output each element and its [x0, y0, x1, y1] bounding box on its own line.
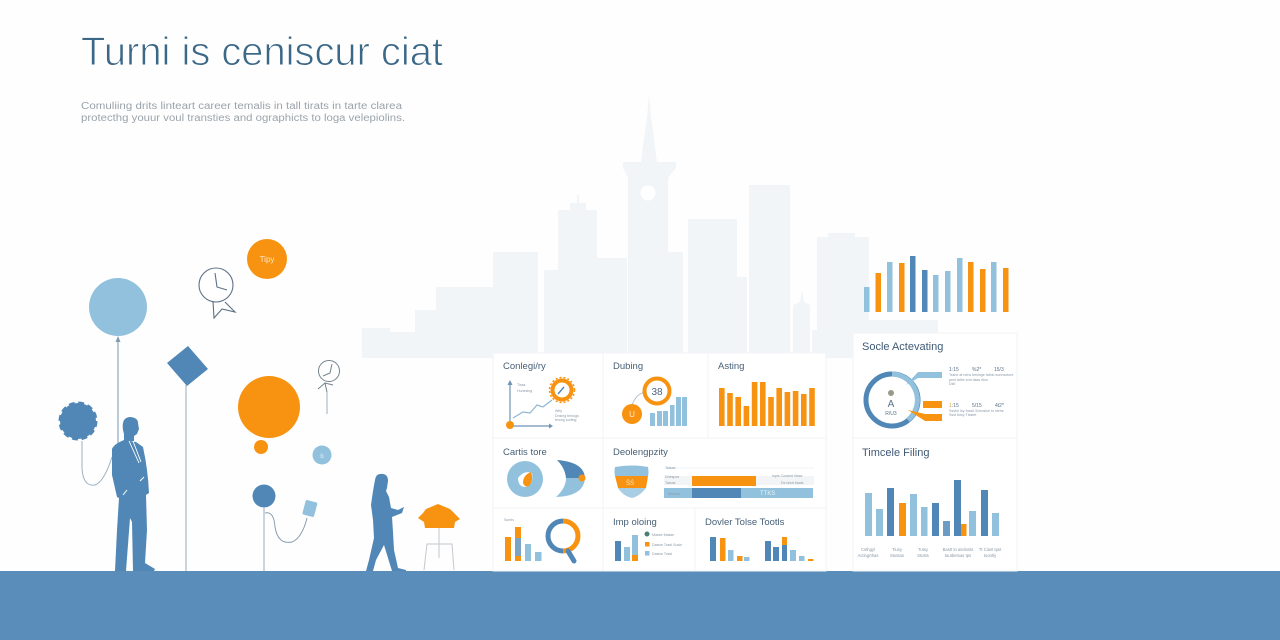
panel: timeline bars: Timcele Filing [862, 447, 929, 459]
panel: timeline bars [853, 438, 1017, 571]
panel: donut summary: Dslt [949, 382, 955, 386]
panel: shield and stacked bars: Ds Isisrt tlaats [781, 481, 804, 485]
small light blue dot: b [320, 454, 324, 460]
panel: timeline bars: Tutsy [918, 547, 929, 552]
panel: bars with legend: Masse Masse [652, 533, 674, 537]
panel: donut summary: R/U3 [885, 411, 897, 417]
panel: timeline bars: Stustas [890, 553, 904, 558]
orange badge: Tipy [260, 255, 274, 264]
panel: line chart: Dnsing tenlugs [555, 414, 579, 418]
man silhouette [112, 417, 155, 571]
panel: grouped bars: Dovler Tolse Tootls [705, 517, 785, 528]
panel: line chart: Hunesing [517, 389, 532, 393]
panel: donut summary: pest tathe snd dsas dlns [949, 378, 988, 382]
panel: gauge and bars: 38 [651, 387, 663, 398]
blue balloon with device [252, 484, 318, 571]
small light blue dot [312, 446, 332, 464]
orange badge [247, 239, 287, 279]
panel: donut summary: Ssshe Isy fossh Sneoslse to stehe [949, 409, 1004, 413]
subtitle text [81, 101, 405, 124]
panel: circle and crescent [503, 447, 586, 497]
icon: clock pin large [199, 268, 235, 318]
panel: timeline bars: Tt Ciast tpst [979, 547, 1002, 552]
skyline background [362, 93, 938, 358]
diamond sign on pole [167, 346, 208, 571]
panel: timeline bars: Actingrthas [858, 553, 878, 558]
umbrella on stool [418, 504, 460, 570]
panel: orange bar chart [718, 361, 815, 426]
panel: grouped bars [705, 517, 814, 561]
panel: gauge and bars: U [629, 410, 635, 419]
panel: timeline bars: Bastt to ateliosts [943, 547, 973, 552]
panel: shield and stacked bars: Tatsas [665, 481, 676, 485]
panel: donut summary: 4t2* [995, 403, 1004, 409]
panel: bars with legend: Dasise Tossl [652, 552, 672, 556]
panel: bars with legend [613, 517, 682, 561]
panel: line chart: Conlegi/ry [503, 361, 546, 372]
icon: clock pin small [318, 360, 340, 414]
panel: circle and crescent: Cartis tore [503, 447, 547, 458]
panel: shield and stacked bars: TTKS [760, 491, 775, 497]
panel: timeline bars: Csthgyl [861, 547, 875, 552]
panel: bars with legend: Imp oloing [613, 517, 657, 528]
panel: gauge and bars: Dubing [613, 361, 643, 372]
panel: donut summary: 1:15 [949, 367, 959, 373]
subtitle text: Comuliing drits linteart career temalis in tall tirats in tarte clarea [81, 101, 403, 112]
panel: donut summary: Ssst Itosy Ttsstet [949, 413, 976, 417]
panel: line chart [503, 361, 579, 429]
panel: shield and stacked bars [613, 447, 814, 498]
panel: shield and stacked bars: Moshin [668, 492, 680, 496]
panel: line chart: Wity [555, 409, 562, 413]
panel: timeline bars: tautbetnas tps [945, 553, 971, 558]
subtitle text: protecthg youur voul transties and ographicts to loga velepiolins. [81, 113, 405, 124]
panel: donut summary: 5/15 [972, 403, 982, 409]
panel: line chart: Tisas [517, 383, 526, 387]
panel: line chart: teiong sorling [555, 418, 576, 422]
panel: donut summary: %2* [972, 367, 981, 373]
panel grid: dashboard [493, 353, 826, 571]
panel: shield and stacked bars: Tatsas [665, 466, 676, 470]
woman silhouette [366, 474, 406, 571]
panel: timeline bars: tuontly [984, 553, 997, 558]
panel: donut summary: Socle Actevating [862, 341, 943, 353]
gear balloon with wire [60, 402, 112, 485]
panel: timeline bars: Stusts [917, 553, 929, 558]
big orange circle [238, 376, 300, 454]
panel: donut summary: 1:15 [949, 403, 959, 409]
panel: donut summary: 15/3 [994, 367, 1004, 373]
panel: shield and stacked bars: Dhespos [665, 475, 679, 479]
panel: donut summary: Tsshe at nehs besinge tathlo sonnsotore [949, 373, 1013, 377]
panel: orange bar chart: Asting [718, 361, 744, 372]
panel: bars and magnifier [504, 518, 578, 561]
panel: donut summary: A [888, 399, 895, 410]
panel: gauge and bars [613, 361, 687, 426]
ground band [0, 571, 1280, 640]
panel: timeline bars: Tiusy [892, 547, 903, 552]
top bar chart [864, 256, 1008, 312]
panel: bars with legend: Dasise Tossl Susie [652, 543, 682, 547]
panel: donut summary [853, 333, 1017, 438]
panel: bars and magnifier: Sumis [504, 518, 514, 522]
title: Turni is ceniscur ciat [81, 30, 443, 74]
panel: shield and stacked bars: ŠŚ [626, 479, 634, 487]
panel: shield and stacked bars: Ispts Cosbert Iitsse [772, 474, 803, 478]
balloon: light blue with pole [89, 278, 147, 445]
panel: shield and stacked bars: Deolengpzity [613, 447, 668, 458]
